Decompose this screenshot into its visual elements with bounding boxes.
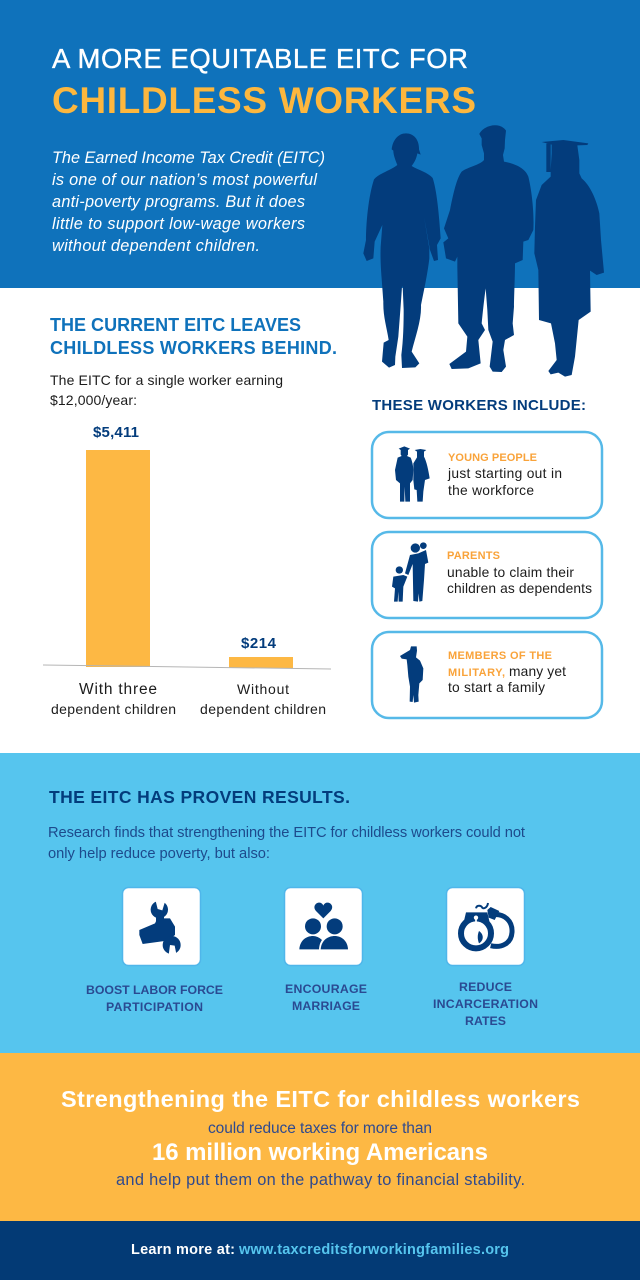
- label: boost labor force participation: BOOST LABOR FORCE: [86, 983, 223, 997]
- text: military: many yet: [509, 664, 566, 679]
- intro text: without dependent children.: [52, 237, 260, 255]
- label: encourage marriage: [285, 982, 367, 1013]
- text: young people: just starting out in: [447, 466, 562, 481]
- intro text: [52, 149, 325, 255]
- benefit: marriage: [284, 888, 367, 1013]
- label: boost labor force participation: PARTICIPATION: [106, 1000, 203, 1014]
- icon: handcuffs: [461, 903, 512, 948]
- text: military: MILITARY,: [448, 667, 505, 679]
- figure: graduate in cap and gown: [534, 140, 604, 377]
- panel: call to action background: [0, 1053, 640, 1221]
- label: without dependent children: Without: [237, 681, 289, 697]
- text: military: to start a family: [448, 680, 545, 695]
- panel: header background: [0, 0, 640, 288]
- icon: couple with heart: [299, 903, 348, 949]
- text: chart intro: [50, 372, 283, 408]
- benefit: labor force: [86, 888, 223, 1014]
- label: boost labor force participation: [86, 983, 223, 1014]
- call to action text: 16 million working Americans: [152, 1139, 488, 1166]
- intro text: is one of our nation’s most powerful: [52, 171, 317, 189]
- intro text: The Earned Income Tax Credit (EITC): [52, 149, 325, 167]
- text: young people: [447, 452, 562, 498]
- bar: with three children: [86, 450, 150, 667]
- title: [52, 43, 476, 121]
- intro text: little to support low-wage workers: [52, 215, 305, 233]
- heading: current EITC: [50, 315, 337, 358]
- label: with three dependent children: [51, 681, 176, 717]
- label: with three dependent children: dependent children: [51, 701, 176, 717]
- heading: current EITC: CHILDLESS WORKERS BEHIND.: [50, 338, 337, 358]
- icon: hand with wrench: [139, 898, 181, 956]
- label: reduce incarceration rates: INCARCERATION: [433, 997, 538, 1011]
- title: A MORE EQUITABLE EITC FOR: [52, 43, 468, 74]
- text: military: MEMBERS OF THE: [448, 650, 552, 662]
- icon: saluting soldier: [400, 646, 423, 703]
- figure: woman in work clothes: [363, 133, 441, 368]
- label: without dependent children: [200, 681, 326, 717]
- call to action text: [61, 1086, 580, 1189]
- text: parents: [447, 550, 592, 596]
- call to action text: could reduce taxes for more than: [208, 1120, 432, 1137]
- text: research finding: only help reduce poverty, but also:: [48, 846, 270, 862]
- footer link text: www.taxcreditsforworkingfamilies.org: [238, 1242, 509, 1258]
- icon: graduates: [395, 446, 430, 502]
- label: encourage marriage: MARRIAGE: [292, 999, 360, 1013]
- text: young people: the workforce: [448, 483, 534, 498]
- text: chart intro: $12,000/year:: [50, 392, 137, 408]
- bar chart: [43, 424, 331, 717]
- heading: these workers include: THESE WORKERS INCLUDE:: [372, 397, 586, 414]
- panel: white body background: [0, 288, 640, 753]
- call to action text: and help put them on the pathway to financial stability.: [116, 1171, 525, 1189]
- text: young people: YOUNG PEOPLE: [448, 452, 537, 464]
- icon: parent with children: [392, 542, 428, 602]
- panel: parents: [372, 532, 602, 618]
- panel: young people: [372, 432, 602, 518]
- intro text: anti-poverty programs. But it does: [52, 193, 305, 211]
- panel: military: [372, 632, 602, 718]
- illustration: three worker silhouettes: [363, 125, 604, 377]
- text: parents: PARENTS: [447, 550, 500, 562]
- value: $5,411: $5,411: [93, 424, 139, 441]
- label: reduce incarceration rates: RATES: [465, 1014, 506, 1028]
- text: research finding: [48, 825, 525, 862]
- label: with three dependent children: With three: [79, 681, 157, 698]
- text: military: [448, 650, 566, 695]
- benefit: incarceration: [433, 888, 538, 1028]
- text: research finding: Research finds that strengthening the EITC for childless workers could not: [48, 825, 525, 841]
- figure: man in cap and fatigues: [443, 125, 534, 372]
- bar: without children: [229, 657, 293, 668]
- label: encourage marriage: ENCOURAGE: [285, 982, 367, 996]
- text: parents: unable to claim their: [447, 565, 574, 580]
- heading: proven results: THE EITC HAS PROVEN RESULTS.: [49, 787, 350, 807]
- label: reduce incarceration rates: [433, 980, 538, 1028]
- value: $214: $214: [241, 635, 277, 652]
- text: parents: children as dependents: [447, 581, 592, 596]
- label: reduce incarceration rates: REDUCE: [459, 980, 512, 994]
- label: without dependent children: dependent children: [200, 701, 326, 717]
- call to action text: Strengthening the EITC for childless workers: [61, 1086, 580, 1112]
- title: CHILDLESS WORKERS: [52, 80, 476, 121]
- text: chart intro: The EITC for a single worker earning: [50, 372, 283, 388]
- heading: current EITC: THE CURRENT EITC LEAVES: [50, 315, 301, 335]
- panel: proven results background: [0, 753, 640, 1053]
- panel: footer background: [0, 1221, 640, 1280]
- footer link text: Learn more at:: [131, 1242, 235, 1258]
